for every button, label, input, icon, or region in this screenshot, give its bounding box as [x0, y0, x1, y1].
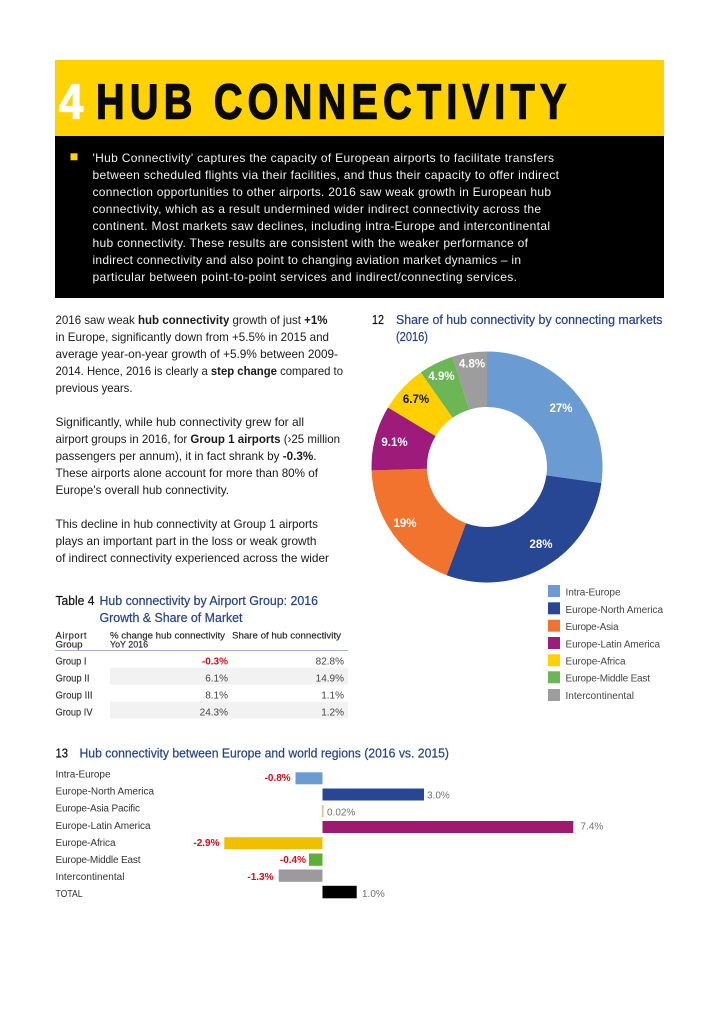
- bar chart: -2.9%: [193, 838, 220, 849]
- body text: 2016 saw weak hub connectivity growth of just +1%: [56, 313, 328, 327]
- table 4: 1.2%: [321, 708, 344, 718]
- bar chart: Europe-North America: [56, 786, 154, 798]
- body text: previous years.: [56, 381, 132, 395]
- donut chart: 4.8%: [459, 358, 485, 370]
- intro panel: connectivity, which as a result undermined wider indirect connectivity across the: [92, 202, 541, 216]
- heading: figure 12: 12: [372, 313, 384, 327]
- donut chart: [372, 351, 603, 583]
- intro panel: particular between point-to-point services and indirect/connecting services.: [92, 270, 517, 284]
- table 4: Airport: [56, 630, 87, 642]
- bar chart: 7.4%: [580, 822, 603, 832]
- bar chart: Intercontinental: [56, 872, 124, 883]
- title banner: HUB CONNECTIVITY: [96, 75, 566, 130]
- body text: Significantly, while hub connectivity grew for all: [56, 415, 304, 429]
- table 4: Group II: [56, 674, 90, 684]
- bar chart: Europe-Asia Pacific: [56, 804, 140, 814]
- intro panel: between scheduled flights via their facilities, and thus their capacity to offer indirect: [92, 168, 560, 182]
- body text: average year-on-year growth of +5.9% between 2009-: [56, 347, 338, 361]
- bar chart: [56, 770, 603, 900]
- body text: 2014. Hence, 2016 is clearly a step change compared to: [56, 364, 343, 378]
- table 4: 14.9%: [316, 674, 344, 684]
- intro panel: 'Hub Connectivity' captures the capacity of European airports to facilitate transfers: [92, 151, 554, 165]
- table 4: Group IV: [56, 708, 93, 718]
- body text: plays an important part in the loss or weak growth: [56, 534, 316, 548]
- bar chart: 0.02%: [327, 808, 355, 818]
- table 4: Group: [56, 640, 82, 650]
- intro panel: [55, 136, 664, 298]
- table 4: Share of hub connectivity: [232, 630, 341, 642]
- donut legend: Europe-North America: [566, 605, 663, 616]
- table 4: % change hub connectivity: [110, 630, 225, 642]
- body text: passengers per annum), it in fact shrank by -0.3%.: [56, 449, 316, 463]
- bar chart: Europe-Middle East: [56, 855, 141, 866]
- table 4: YoY 2016: [110, 640, 148, 650]
- heading: table 4: Growth & Share of Market: [100, 611, 243, 625]
- bar chart: Intra-Europe: [56, 770, 111, 780]
- donut chart: 9.1%: [381, 437, 408, 449]
- body text: in Europe, significantly down from +5.5% in 2015 and: [56, 330, 329, 344]
- bar chart: -0.8%: [265, 773, 291, 784]
- body text: airport groups in 2016, for Group 1 airports (›25 million: [56, 432, 340, 446]
- donut chart: 19%: [393, 518, 417, 530]
- bar chart: 1.0%: [362, 889, 385, 900]
- table 4: 82.8%: [316, 656, 344, 668]
- table 4: 24.3%: [200, 708, 228, 718]
- table 4: 1.1%: [321, 690, 344, 702]
- donut legend: [548, 585, 663, 702]
- intro panel: hub connectivity. These results are consistent with the weaker performance of: [92, 236, 529, 250]
- donut legend: Intra-Europe: [566, 588, 621, 598]
- bar chart: -0.4%: [280, 855, 306, 866]
- donut legend: Europe-Asia: [566, 622, 619, 633]
- intro panel: continent. Most markets saw declines, including intra-Europe and intercontinental: [92, 219, 550, 233]
- heading: table 4: Table 4: [56, 594, 95, 608]
- heading: figure 13: 13: [56, 746, 68, 760]
- heading: figure 13: Hub connectivity between Europe and world regions (2016 vs. 2015): [80, 746, 449, 760]
- table 4: Group III: [56, 690, 92, 702]
- intro panel: connection opportunities to other airports. 2016 saw weak growth in European hub: [92, 185, 551, 199]
- heading: figure 12: Share of hub connectivity by connecting markets: [396, 313, 662, 327]
- table 4: [55, 630, 348, 718]
- table 4: Group I: [56, 656, 86, 668]
- table 4: 6.1%: [205, 674, 228, 684]
- donut legend: Intercontinental: [566, 691, 634, 702]
- donut chart: 28%: [529, 539, 553, 551]
- donut legend: Europe-Africa: [566, 656, 626, 668]
- intro panel: indirect connectivity and also point to changing aviation market dynamics – in: [92, 253, 521, 267]
- title banner: [55, 60, 664, 136]
- heading: table 4: [56, 594, 318, 625]
- bar chart: 3.0%: [427, 790, 450, 802]
- heading: figure 12: [372, 313, 662, 344]
- body text: These airports alone account for more than 80% of: [56, 466, 319, 480]
- bar chart: -1.3%: [247, 872, 274, 883]
- body text: This decline in hub connectivity at Group 1 airports: [56, 517, 318, 531]
- bar chart: TOTAL: [56, 889, 83, 900]
- donut legend: Europe-Middle East: [566, 674, 650, 684]
- donut legend: Europe-Latin America: [566, 639, 660, 650]
- table 4: 8.1%: [205, 690, 228, 702]
- title banner: 4: [59, 74, 83, 129]
- table 4: -0.3%: [202, 656, 228, 668]
- bar chart: Europe-Africa: [56, 838, 116, 849]
- heading: table 4: Hub connectivity by Airport Group: 2016: [100, 594, 318, 608]
- donut chart: 27%: [549, 403, 573, 415]
- body text: of indirect connectivity experienced across the wider: [56, 551, 329, 565]
- body text: Europe's overall hub connectivity.: [56, 483, 229, 497]
- donut chart: 6.7%: [403, 394, 429, 406]
- bar chart: Europe-Latin America: [56, 821, 151, 832]
- body text: [56, 313, 343, 565]
- donut chart: 4.9%: [428, 371, 455, 383]
- heading: figure 12: (2016): [396, 330, 428, 344]
